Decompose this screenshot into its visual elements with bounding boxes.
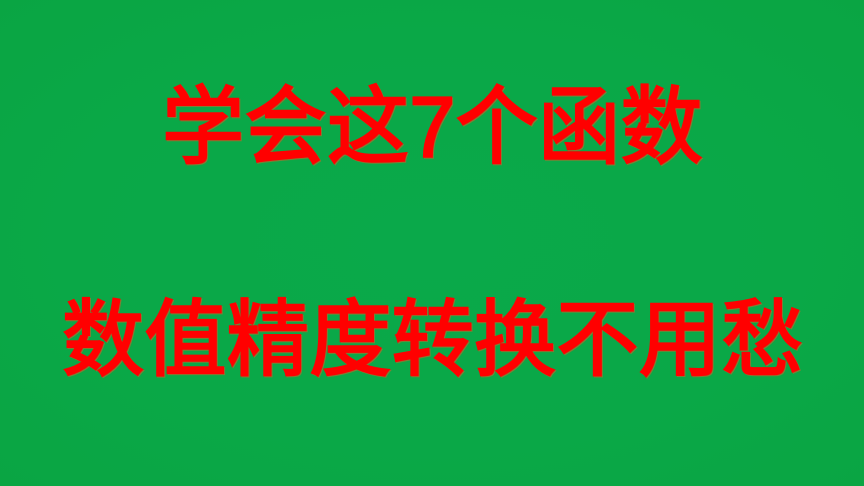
heading: second line: 数值精度转换不用愁	[62, 294, 804, 387]
heading: first line: 学会这7个函数	[162, 81, 703, 175]
